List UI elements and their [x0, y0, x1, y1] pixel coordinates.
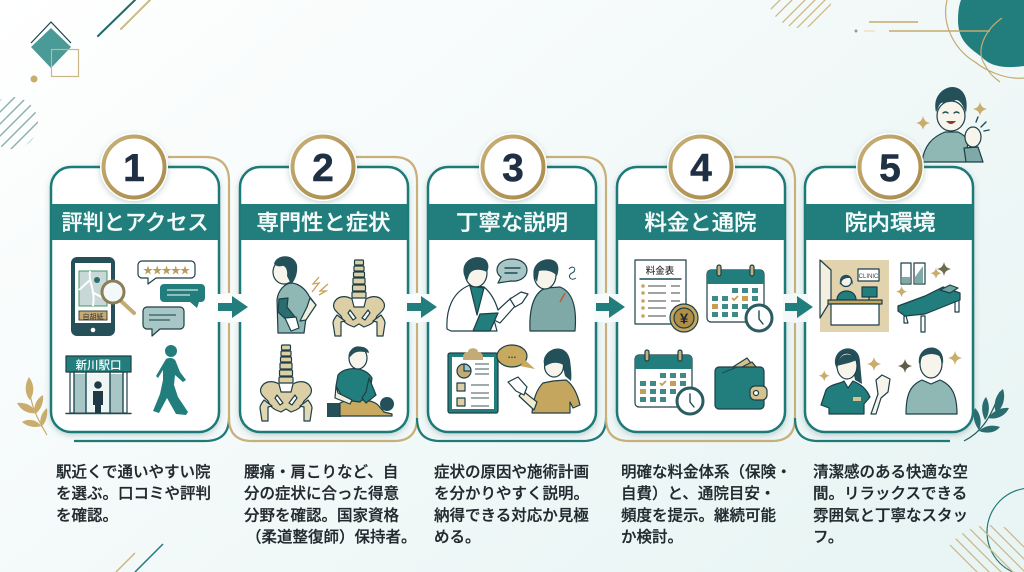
step 4 header band [618, 204, 784, 240]
icon: spine and pelvis [333, 260, 385, 336]
icon: wallet [715, 358, 767, 409]
description 4: 自費）と、通院目安・ [621, 485, 775, 503]
arrow 4 [783, 294, 813, 322]
description 3: める。 [434, 529, 481, 546]
icon: smiling man [916, 87, 989, 162]
description 1: を選ぶ。口コミや評判 [56, 485, 211, 503]
icon: woman asking with bubble: … [508, 350, 516, 360]
leaf: teal sprig [964, 389, 1009, 441]
panel: step 4 [617, 133, 785, 432]
step 2 header band [241, 204, 407, 240]
step 5 number badge [856, 133, 924, 201]
step 3 number badge [479, 133, 547, 201]
step 5 number badge: 5 [879, 147, 901, 190]
step 3 heading: 丁寧な説明 [456, 211, 568, 235]
icon: clipboard checklist [448, 348, 498, 413]
step 3 number badge: 3 [502, 147, 524, 190]
step 1 number badge [100, 133, 168, 201]
description 2: 分野を確認。国家資格 [244, 506, 400, 524]
decoration: top-right shapes [755, 0, 1024, 82]
icon: station entrance [66, 356, 131, 414]
icon: woman asking with bubble [497, 345, 580, 413]
description 3: 納得できる対応か見極 [434, 506, 589, 524]
panel: step 2 [240, 133, 408, 432]
icon: patient with shoulder pain [530, 259, 576, 331]
icon: reception desk: CLINIC [859, 274, 879, 280]
icon: walking person [153, 345, 188, 415]
icon: treatment bed [896, 262, 960, 332]
step 1 header band [52, 204, 218, 240]
description 5: 清潔感のある快適な空 [813, 463, 968, 481]
icon: review bubbles [138, 261, 205, 336]
leaf: gold sprig [17, 377, 47, 435]
icon: calendar and clock [707, 265, 772, 331]
arrow 2 [405, 294, 437, 322]
decoration: top-left shapes [30, 0, 150, 82]
step 5 header band [806, 204, 972, 240]
icon: price list with yen coin: 料金表 [646, 265, 675, 277]
icon: calendar and clock lower [635, 350, 703, 414]
connector lines [74, 157, 950, 441]
icon: price list with yen coin [635, 260, 698, 332]
step 5 heading: 院内環境 [844, 211, 936, 235]
panel: step 3 [428, 133, 596, 432]
arrow 3 [594, 294, 625, 322]
step 2 heading: 専門性と症状 [256, 211, 391, 235]
description 1: 駅近くで通いやすい院 [56, 463, 211, 481]
icon: review bubbles: ★★★★★ [143, 266, 190, 277]
icon: spine and pelvis lower [260, 345, 312, 421]
step 1 heading: 評判とアクセス [62, 211, 208, 235]
description 5: 雰囲気と丁寧なスタッ [813, 506, 968, 524]
icon: nurse waving [819, 348, 890, 414]
description 5: 間。リラックスできる [813, 485, 967, 503]
step 4 number badge: 4 [690, 147, 712, 190]
description 4: か検討。 [621, 528, 683, 546]
step 2 number badge [289, 133, 357, 201]
description 1: を確認。 [56, 506, 118, 524]
icon: price list with yen coin: ¥ [680, 310, 689, 328]
panel: step 5 [805, 87, 989, 432]
description 5: フ。 [813, 529, 843, 546]
step 4 heading: 料金と通院 [644, 211, 756, 235]
icon: phone with map: 自胡紙 [82, 312, 104, 321]
icon: station entrance: 新川駅口 [76, 359, 122, 372]
icon: relaxed patient [898, 347, 962, 414]
description 3: 症状の原因や施術計画 [434, 463, 589, 481]
step 2 number badge: 2 [312, 147, 334, 190]
arrow 1 [216, 294, 248, 322]
icon: doctor explaining [447, 257, 528, 331]
description 3: を分かりやすく説明。 [434, 485, 589, 503]
icon: reception desk [820, 260, 889, 332]
step 4 number badge [667, 133, 735, 201]
icon: therapist massage [327, 347, 394, 417]
description 4: 明確な料金体系（保険・ [621, 463, 792, 481]
panel: step 1 [51, 133, 219, 432]
decoration: left stripes [0, 97, 38, 149]
step 3 header band [429, 204, 595, 240]
description 2: （柔道整復師）保持者。 [246, 528, 417, 546]
icon: person with back pain [273, 256, 328, 333]
decoration: bottom shapes [116, 488, 1024, 572]
description 2: 分の症状に合った得意 [244, 485, 399, 503]
description 4: 頻度を提示。継続可能 [621, 506, 777, 524]
description 2: 腰痛・肩こりなど、自 [244, 463, 398, 481]
icon: phone with map [71, 257, 134, 336]
step 1 number badge: 1 [123, 147, 145, 190]
